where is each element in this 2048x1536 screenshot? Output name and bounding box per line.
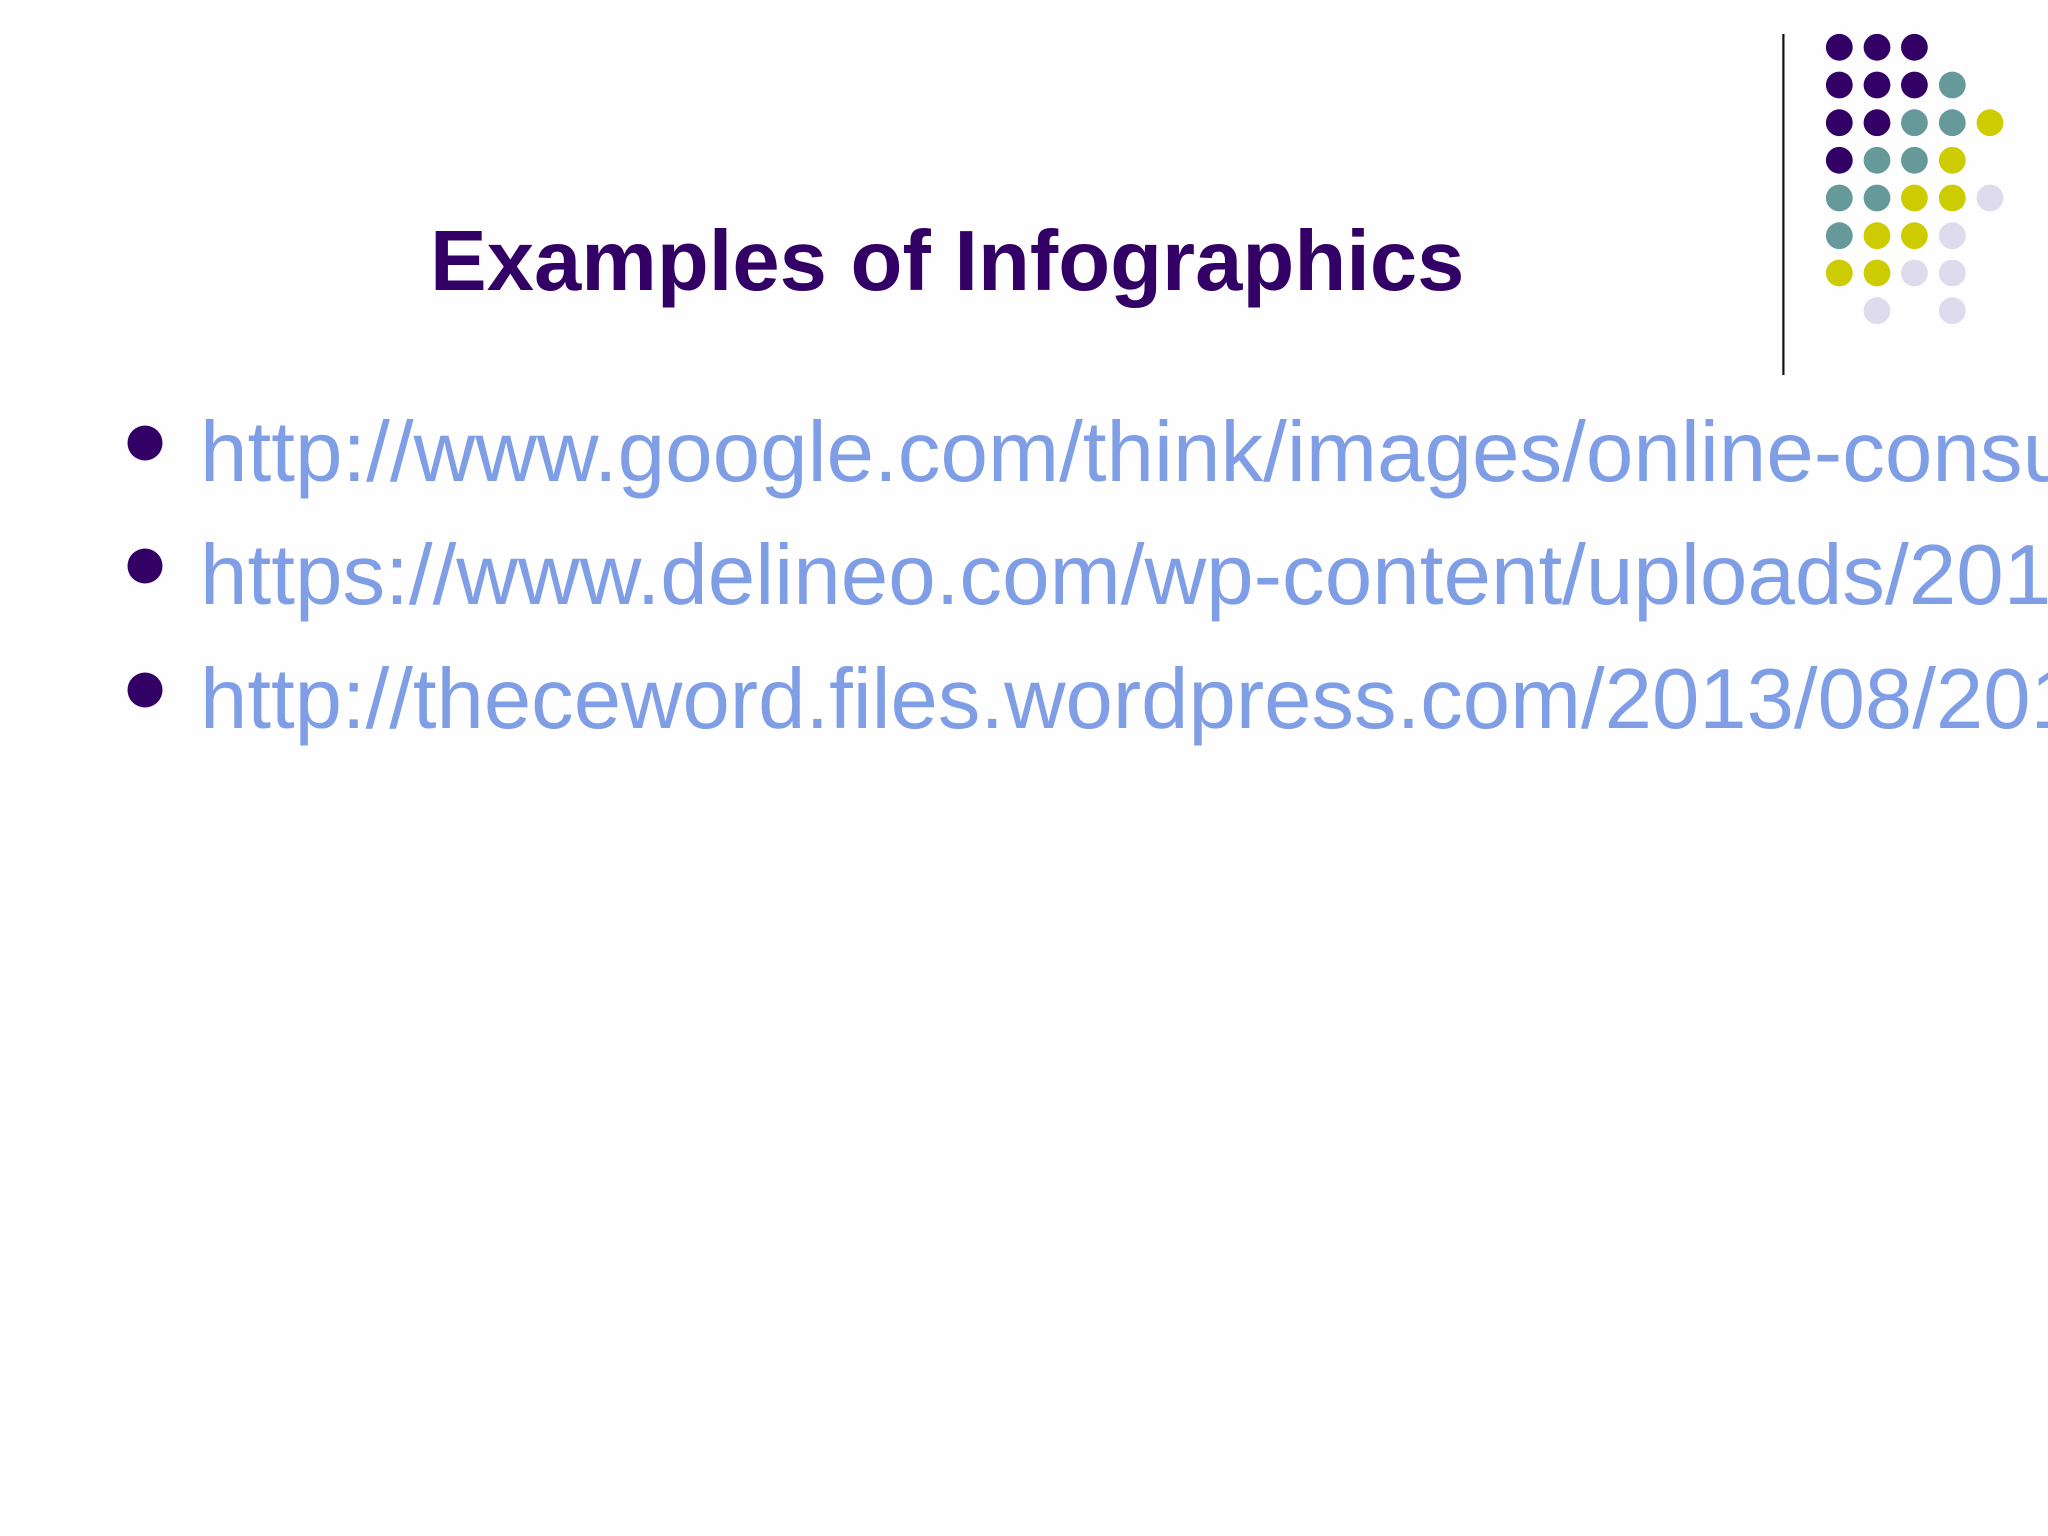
link text 1: http://www.google.com/think/images/online-consu [200,405,2048,500]
bullet 3 [128,672,162,708]
bullet 2 [128,548,162,584]
bullet 1 [128,426,162,460]
decorative dot grid [1826,34,2003,324]
vertical divider line [1782,34,1784,375]
link text 2: https://www.delineo.com/wp-content/uploads/201 [200,528,2048,623]
link text 3: http://theceword.files.wordpress.com/2013/08/201 [200,652,2048,747]
title: Examples of Infographics [430,214,1464,309]
